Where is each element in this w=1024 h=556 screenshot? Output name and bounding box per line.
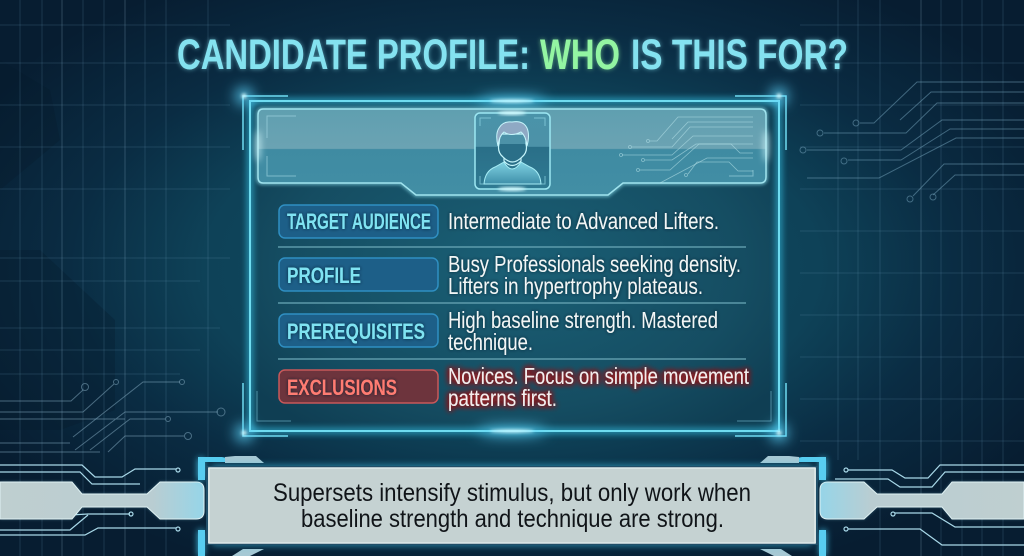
row: prerequisites: PREREQUISITES bbox=[287, 319, 425, 344]
row: prerequisites: High baseline strength. Mastered bbox=[448, 307, 718, 333]
connector: left bbox=[0, 482, 204, 519]
row: exclusions bbox=[279, 363, 749, 411]
callout: key takeaway: Supersets intensify stimulus, but only work when bbox=[273, 479, 751, 507]
connector: right bbox=[820, 482, 1024, 519]
row: target audience: Intermediate to Advanced Lifters. bbox=[448, 208, 719, 234]
row: target audience bbox=[279, 205, 719, 238]
row: profile: Lifters in hypertrophy plateaus. bbox=[448, 273, 703, 299]
row: exclusions: EXCLUSIONS bbox=[287, 375, 397, 400]
row: exclusions: patterns first. bbox=[448, 385, 557, 411]
callout: key takeaway bbox=[198, 456, 826, 556]
header side glows bbox=[256, 130, 768, 162]
row: profile: Busy Professionals seeking density. bbox=[448, 251, 741, 277]
title: IS THIS FOR? bbox=[631, 31, 848, 79]
panel: candidate profile card bbox=[236, 88, 787, 441]
header circuit lines bbox=[620, 117, 753, 183]
connector traces: right bbox=[835, 465, 1024, 545]
row: profile bbox=[279, 251, 741, 299]
circuit traces: lower left bbox=[0, 380, 225, 452]
connector traces: left bbox=[0, 465, 180, 535]
divider bbox=[278, 302, 746, 304]
icon: candidate avatar bbox=[475, 111, 550, 191]
divider bbox=[278, 358, 746, 360]
row: prerequisites: technique. bbox=[448, 329, 533, 355]
panel body bbox=[250, 101, 779, 431]
title: WHO bbox=[540, 31, 620, 79]
header plate bbox=[256, 109, 768, 195]
callout: key takeaway: baseline strength and technique are strong. bbox=[301, 505, 724, 533]
circuit traces: upper right bbox=[800, 82, 1024, 202]
glow nodes bbox=[236, 88, 787, 441]
row: exclusions: Novices. Focus on simple movement bbox=[448, 363, 749, 389]
row: profile: PROFILE bbox=[287, 263, 361, 288]
divider bbox=[278, 246, 746, 248]
title bbox=[177, 31, 848, 79]
title: CANDIDATE PROFILE: bbox=[177, 31, 530, 79]
row: target audience: TARGET AUDIENCE bbox=[287, 209, 431, 234]
row: prerequisites bbox=[279, 307, 718, 355]
